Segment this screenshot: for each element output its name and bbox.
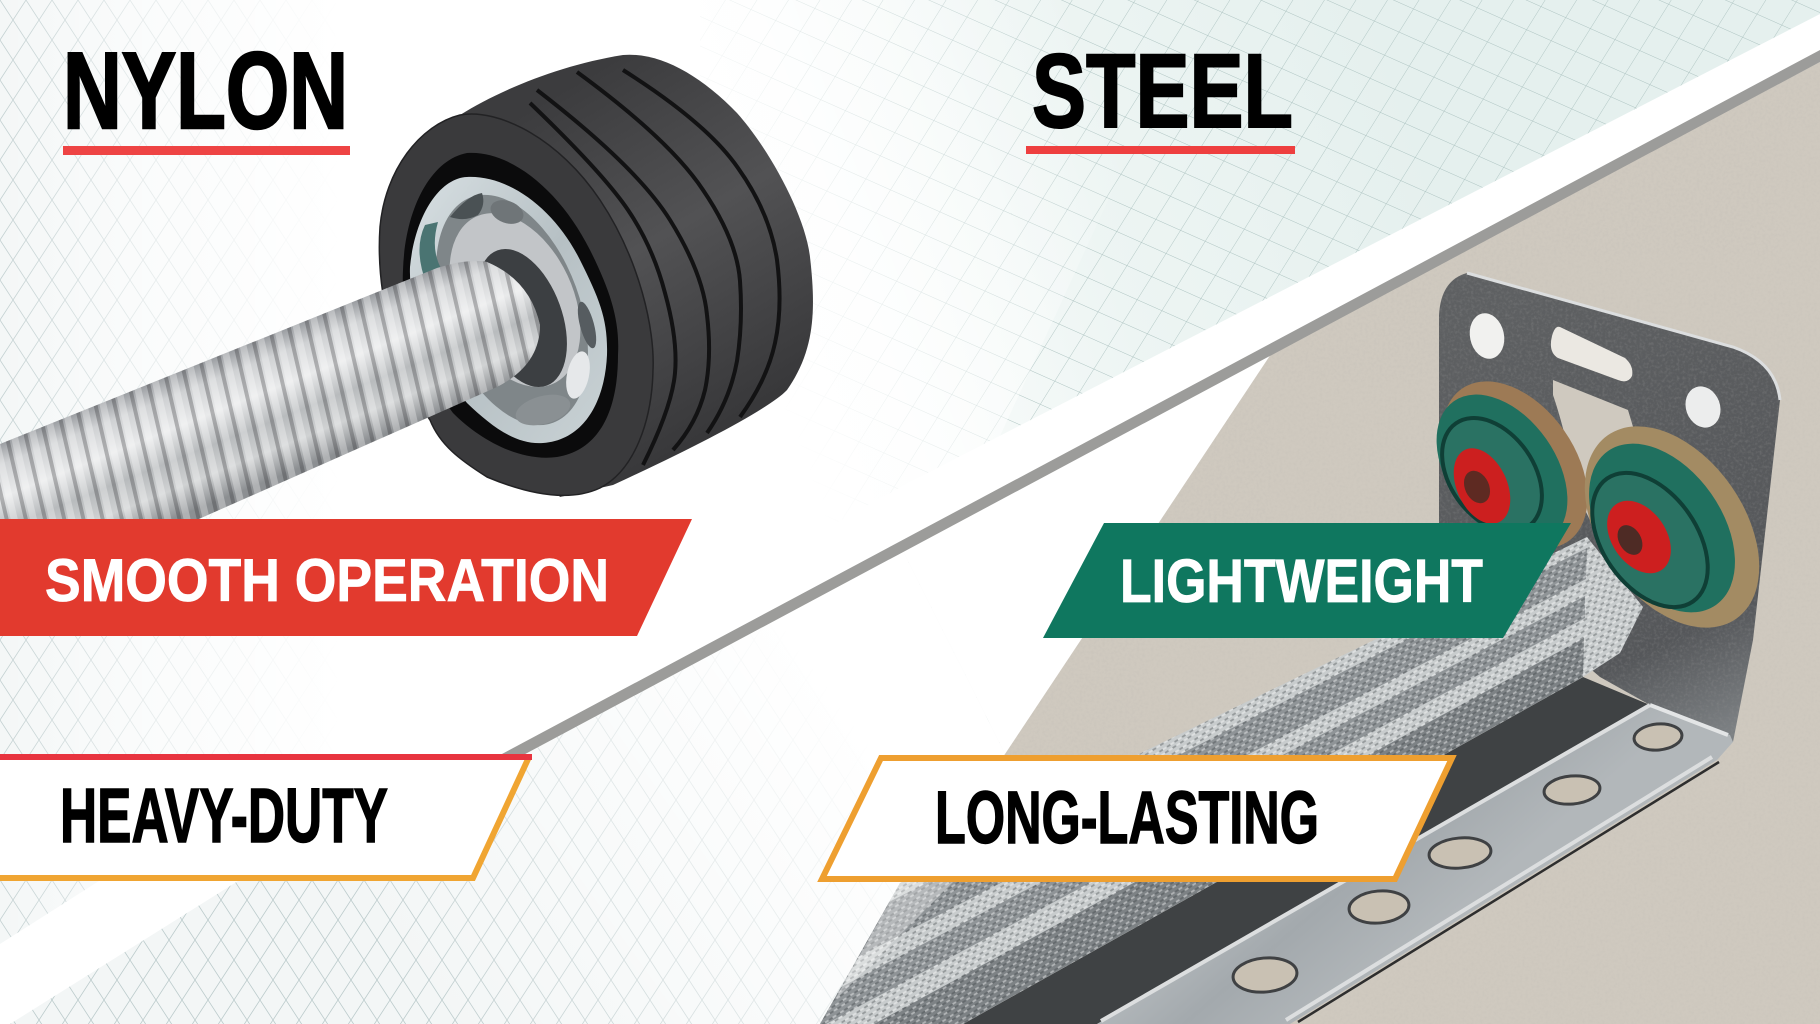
- wheel hub: [403, 153, 618, 458]
- heading: nylon: NYLON: [63, 30, 348, 152]
- plate slot: [1551, 327, 1632, 381]
- diagonal divider line: [502, 50, 1820, 760]
- banner: smooth operation: [0, 519, 692, 636]
- background mesh: upper left: [0, 0, 361, 950]
- background mesh: upper right: [700, 0, 1820, 600]
- background mesh: lower centre: [10, 545, 1005, 1024]
- right roller: [1549, 394, 1795, 660]
- banner: smooth operation: SMOOTH OPERATION: [45, 547, 609, 614]
- plate hole: upper left: [1466, 310, 1508, 362]
- plate notch: [1553, 380, 1634, 520]
- banner: long-lasting: LONG-LASTING: [935, 776, 1319, 859]
- banner: heavy-duty: [0, 754, 532, 878]
- plate hole: upper right: [1680, 381, 1726, 433]
- knurled steel rail: [820, 537, 1643, 1024]
- banner: lightweight: LIGHTWEIGHT: [1120, 547, 1483, 615]
- upright bracket plate: [1430, 265, 1785, 745]
- threaded shaft: [0, 261, 540, 607]
- foot flange with holes: [963, 677, 1733, 1024]
- wheel tread bands: [460, 55, 813, 497]
- heading: steel: STEEL: [1032, 33, 1293, 150]
- banner: long-lasting: [822, 758, 1452, 879]
- banner: heavy-duty: HEAVY-DUTY: [60, 773, 388, 859]
- left roller: [1410, 354, 1617, 576]
- steel bracket assembly: [820, 272, 1782, 1024]
- nylon wheel with threaded shaft: [0, 55, 813, 607]
- banner: lightweight: [1043, 523, 1571, 638]
- concrete surface: [965, 62, 1820, 1024]
- flange holes: [1232, 722, 1683, 995]
- wheel face: [379, 114, 653, 495]
